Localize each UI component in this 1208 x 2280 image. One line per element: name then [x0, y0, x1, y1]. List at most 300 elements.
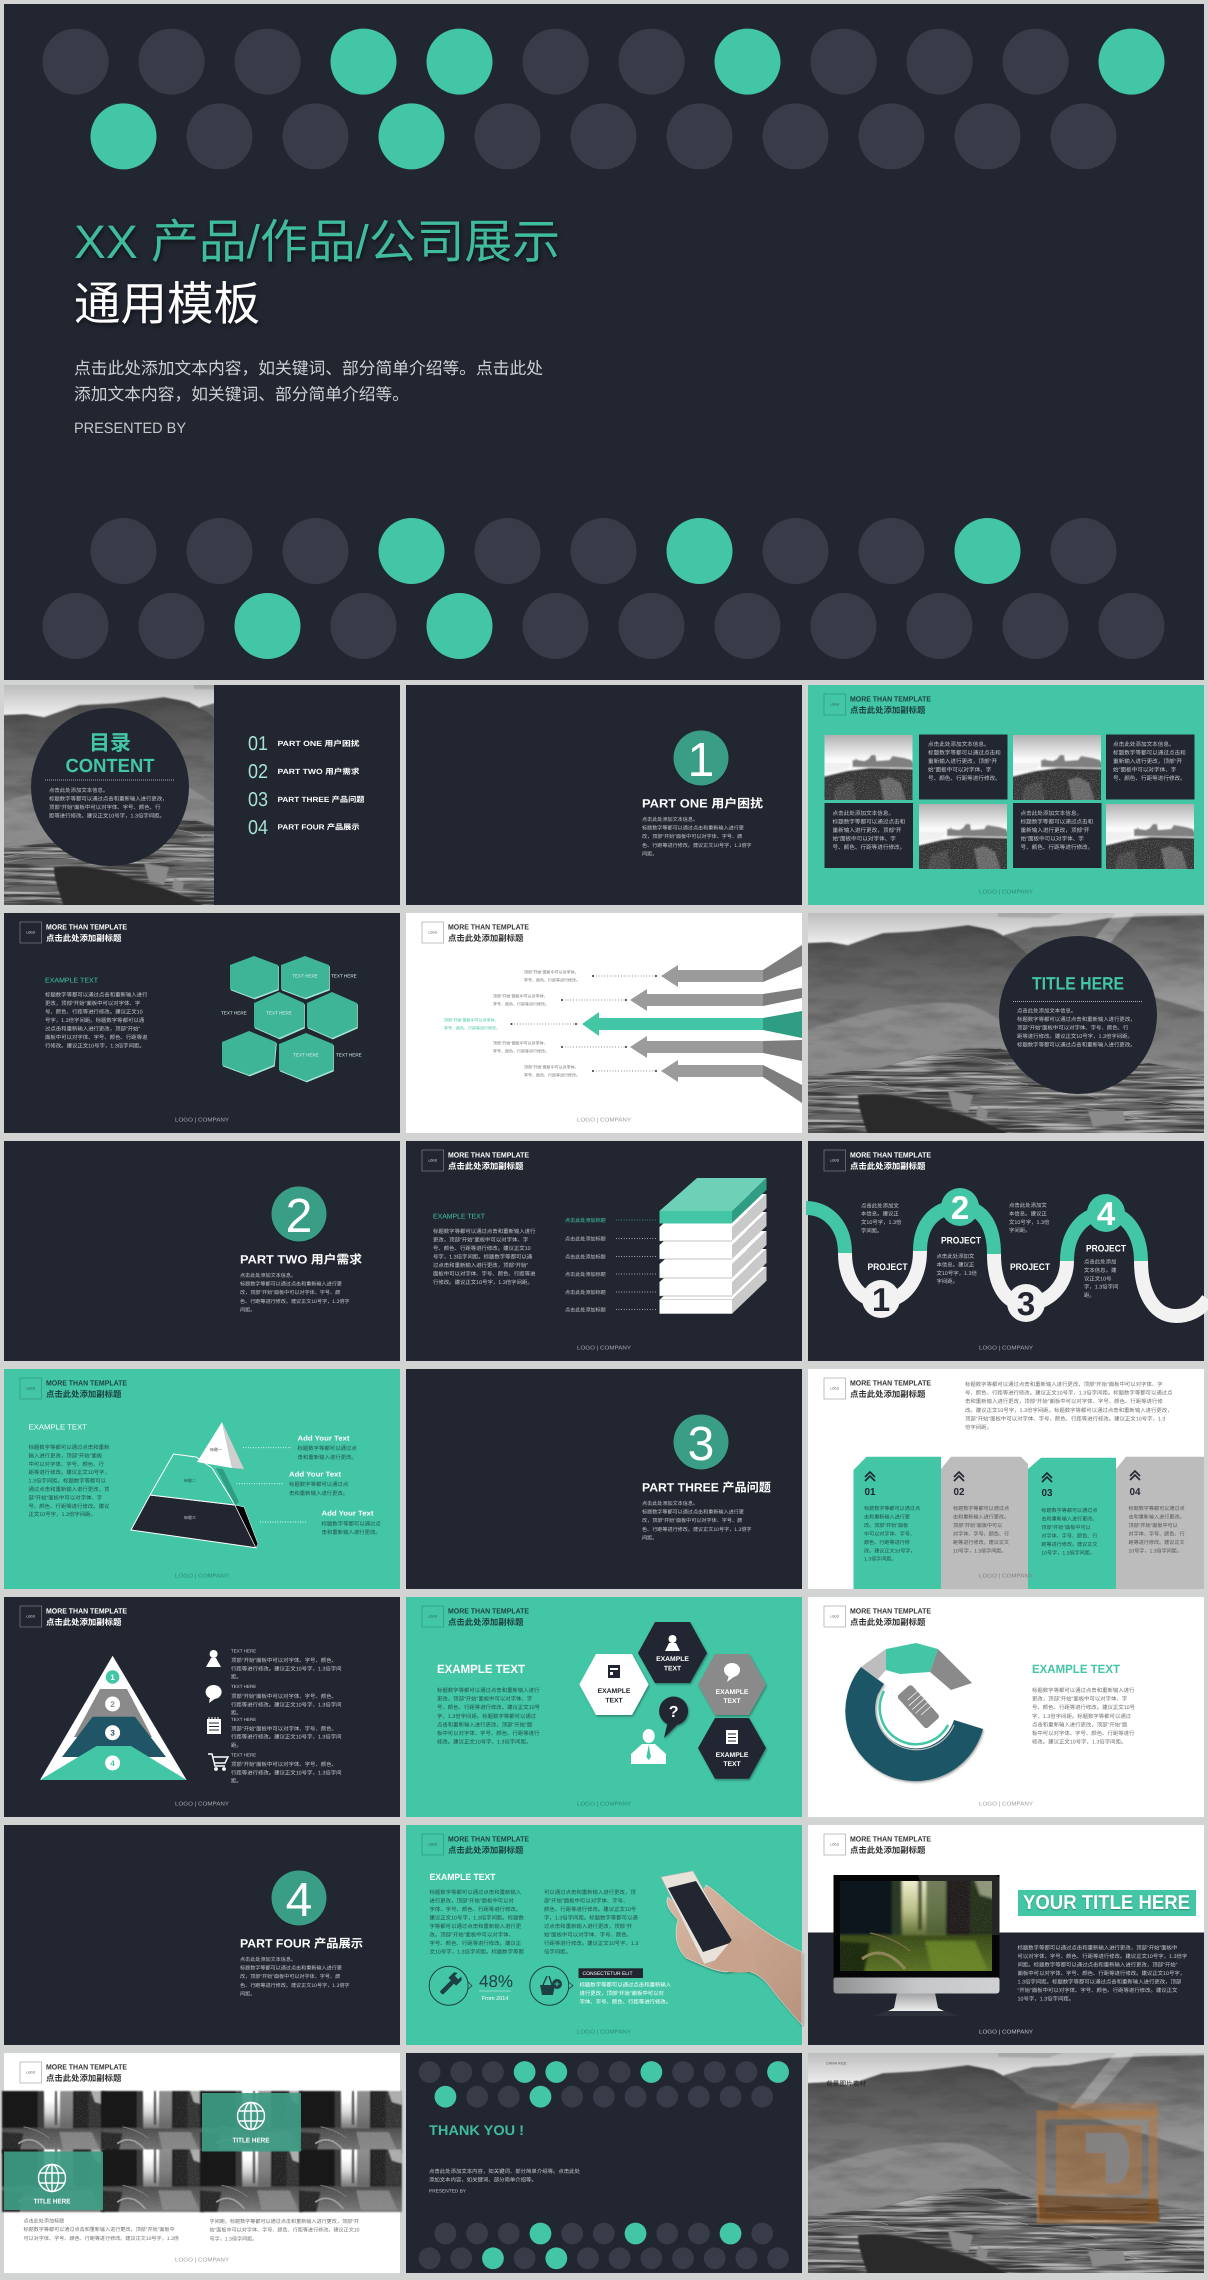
panel: hexagon slide: [4, 913, 400, 1133]
body column 1: 字号、颜色、行距等进行修改。建议正: [430, 1940, 522, 1947]
item 3: TEXT HERE: [231, 1717, 256, 1722]
header: [824, 1606, 931, 1627]
column 01: 颜色、行距等进行修: [864, 1539, 910, 1546]
header: 点击此处添加副标题: [448, 1161, 524, 1171]
contents list: 03: [248, 789, 268, 811]
header: [824, 1150, 931, 1171]
section title: PART THREE 产品问题: [642, 1480, 771, 1494]
text tile top 1: 始”面板中可以对字体、字: [928, 766, 992, 774]
example body: 点击和重新输入进行更改，顶部“开始”面: [1032, 1721, 1128, 1728]
text tile bottom 2: 标题数字等都可以通过点击和: [1020, 818, 1094, 826]
header: MORE THAN TEMPLATE: [448, 1834, 529, 1844]
example body: 行修改。建议正文10号字，1.3倍字间距。: [45, 1042, 145, 1050]
example body: 面板中可以对字体、字号、颜色、行距等进: [433, 1270, 536, 1278]
title circle: 顶部“开始”面板中可以对字体、字号、颜色、行: [1017, 1024, 1129, 1032]
step 3: 3: [1017, 1285, 1035, 1322]
example body: 号、颜色、行距等进行修改。建议正文10: [45, 1008, 143, 1016]
step text: 本信息。建议正: [861, 1211, 899, 1218]
photo wall: [2, 2091, 402, 2212]
footer: LOGO | COMPANY: [979, 888, 1033, 896]
arrow 2: 字号、颜色、行距等进行修改。: [493, 1002, 549, 1006]
section text: 色、行距等进行修改。建议正文10号字，1.3倍字: [642, 1526, 752, 1533]
example body: 更改，顶部“开始”面板中可以对字体、字: [1032, 1696, 1128, 1703]
section number badge: [272, 1186, 326, 1243]
title circle: TITLE HERE: [1032, 974, 1124, 994]
column 03: 对字体、字号、颜色、行: [1041, 1532, 1097, 1539]
contents list: [248, 733, 365, 839]
example body: 过点击和重新输入进行更改，顶部“开始”: [433, 1262, 528, 1269]
panel: contents slide: [1, 682, 403, 908]
header: 点击此处添加副标题: [850, 1389, 926, 1399]
example body: 行修改。建议正文10号字，1.3倍字间距。: [433, 1279, 533, 1286]
column 03: 标题数字等都可以通过点: [1041, 1507, 1097, 1514]
panel: section two: [4, 1141, 400, 1361]
item 1: 顶部“开始”面板中可以对字体、字号、颜色、: [231, 1657, 337, 1664]
section number badge: 1: [688, 734, 714, 787]
column 01: 改。建议正文10号字，: [864, 1547, 916, 1554]
donut chart: [845, 1643, 983, 1781]
stat: 48 percent: From 2014: [481, 1996, 509, 2002]
example body: 正文10号字，1.3倍字间距。: [28, 1511, 96, 1518]
intro text: 改。建议正文10号字，1.3倍字间距。标题数字等都可以通过点击和重新输入进行更改，: [965, 1407, 1173, 1414]
project labels: [868, 1236, 1126, 1273]
step text: 点击此处添加文: [861, 1202, 899, 1209]
body column 2: 始”面板中可以对字体、字号、颜色、: [544, 1932, 632, 1938]
example heading: EXAMPLE TEXT: [433, 1214, 486, 1220]
header: [20, 2062, 127, 2083]
panel: four columns slide: [808, 1369, 1204, 1589]
plate labels: 点击此处添加标题: [565, 1306, 606, 1314]
header: 点击此处添加副标题: [850, 1617, 926, 1627]
footer: LOGO | COMPANY: [979, 2028, 1033, 2036]
tile: globe top: TITLE HERE: [232, 2138, 270, 2144]
panel: forest photo wall slide: [2, 2053, 402, 2273]
step 2: 2: [951, 1189, 969, 1226]
header: MORE THAN TEMPLATE: [448, 1150, 529, 1160]
panel: stacked plates slide: [406, 1141, 802, 1361]
example body: 号、颜色、行距等进行修改。建议: [28, 1503, 110, 1510]
example body: 板中可以对字体、字号、颜色、行距等进行: [1032, 1730, 1135, 1737]
column 01: 中可以对字体、字号、: [864, 1530, 915, 1537]
text tile bottom 1: 标题数字等都可以通过点击和: [832, 818, 906, 826]
hexagon cluster: TEXT HERE: [292, 974, 318, 978]
dot pattern: [419, 2061, 789, 2269]
plate labels: 点击此处添加标题: [565, 1217, 606, 1224]
text tile top 2: 点击此处添加文本信息。: [1113, 741, 1175, 748]
header: [422, 922, 529, 943]
header: 点击此处添加副标题: [448, 1617, 524, 1627]
item 2: 距。: [231, 1710, 242, 1717]
section text: 间距。: [240, 1306, 255, 1313]
header: 点击此处添加副标题: [46, 1617, 122, 1627]
header: MORE THAN TEMPLATE: [46, 922, 127, 932]
thank you heading: THANK YOU !: [429, 2122, 524, 2138]
intro text: 号、颜色、行距等进行修改。建议正文10号字，1.3倍字间距。标题数字等都可以通过点: [965, 1390, 1173, 1397]
contents circle: 目录: [89, 732, 131, 755]
header: 点击此处添加副标题: [850, 705, 926, 715]
column 04: 对字体、字号、颜色、行: [1128, 1530, 1185, 1537]
header: MORE THAN TEMPLATE: [46, 1378, 127, 1388]
arrow 3 highlighted: 顶部“开始”面板中可以对字体、: [444, 1018, 499, 1022]
text tile bottom 1: 始”面板中可以对字体、字: [832, 836, 896, 842]
header: [422, 1150, 529, 1171]
body column 1: 进行更改，顶部“开始”面板中可以对: [430, 1898, 515, 1904]
column 02: 顶部“开始”面板中可以: [953, 1522, 1002, 1529]
title circle: 点击此处添加文本信息。: [1017, 1008, 1076, 1014]
presented by: PRESENTED BY: [74, 420, 186, 437]
section number badge: 3: [688, 1418, 714, 1471]
text tile bottom 2: 始”面板中可以对字体、字: [1020, 836, 1084, 842]
example body: 面板中可以对字体、字号、颜色、行距等进: [45, 1034, 148, 1041]
section text: 点击此处添加文本信息。: [642, 816, 698, 823]
hexagon: calendar: [579, 1654, 649, 1715]
example body: 修改。建议正文10号字，1.3倍字间距。: [437, 1739, 531, 1746]
arrow 4: [493, 1036, 802, 1061]
example body: 号字，1.3倍字间距。标题数字等都可以通: [433, 1254, 533, 1260]
hexagon cluster: TEXT HERE: [336, 1052, 362, 1058]
arrow 5: 顶部“开始”面板中可以对字体、: [524, 1064, 579, 1070]
intro text: 添加文本内容，如关键词、部分简单介绍等。: [74, 385, 409, 404]
arrow 4: 字号、颜色、行距等进行修改。: [493, 1048, 549, 1054]
header: LOGO: [26, 1386, 36, 1390]
contents list: 02: [248, 761, 268, 783]
body text: 10号字，1.3倍字间距。: [1018, 1996, 1074, 2002]
header: MORE THAN TEMPLATE: [850, 1150, 931, 1160]
header: LOGO: [830, 1614, 840, 1618]
text tile top 2: [1106, 734, 1194, 800]
presented by: PRESENTED BY: [429, 2189, 467, 2195]
step text: 距。: [1084, 1292, 1095, 1299]
photo note: 背景图片素材: [826, 2080, 866, 2088]
body column 2: 过点击和重新输入进行更改，顶部“开: [544, 1923, 633, 1930]
text tile bottom 1: 号、颜色、行距等进行修改。: [832, 844, 905, 851]
item 4: 距。: [231, 1778, 242, 1785]
footer: LOGO | COMPANY: [979, 1572, 1033, 1580]
project labels: PROJECT: [1010, 1262, 1050, 1273]
hexagon: chat: [698, 1654, 766, 1715]
step 4: [1087, 1194, 1125, 1232]
item 1: TEXT HERE: [231, 1648, 256, 1654]
header: MORE THAN TEMPLATE: [850, 1606, 931, 1616]
arrow 5: [524, 1060, 802, 1103]
step 1: [862, 1280, 900, 1318]
header: MORE THAN TEMPLATE: [448, 922, 529, 932]
column 01: 1.3倍字间距。: [864, 1556, 897, 1563]
section number badge: [674, 730, 728, 787]
body left: 可以对字体、字号、颜色、行距等进行修改。建议正文10号字，1.3倍: [24, 2235, 179, 2242]
header: LOGO: [830, 1158, 840, 1162]
title: product showcase: XX 产品/作品/公司展示: [74, 215, 560, 268]
header: LOGO: [428, 1158, 438, 1162]
column 03: 顶部“开始”面板中可以: [1041, 1524, 1091, 1531]
hexagon: chat: TEXT: [723, 1698, 742, 1705]
section text: 色、行距等进行修改。建议正文10号字，1.3倍字: [240, 1982, 350, 1989]
contents list: PART FOUR 产品展示: [278, 822, 360, 832]
footer: LOGO | COMPANY: [175, 1572, 229, 1580]
body right: 字间距。标题数字等都可以通过点击和重新输入进行更改，顶部“开: [210, 2218, 359, 2225]
section number badge: [272, 1870, 326, 1927]
text tile top 2: 号、颜色、行距等进行修改。: [1113, 775, 1186, 782]
header: [824, 1834, 931, 1855]
project labels: PROJECT: [868, 1262, 908, 1273]
project labels: PROJECT: [941, 1236, 981, 1246]
footer: LOGO | COMPANY: [577, 1800, 631, 1808]
icon: person: [206, 1650, 221, 1667]
step text: 文10号字，1.3倍: [1009, 1219, 1050, 1226]
label 2: [237, 1470, 349, 1497]
example body: 标题数字等都可以通过点击和重新输入进行: [437, 1687, 540, 1694]
body column 1: 文10号字，1.3倍字间距。标题数字等都: [430, 1948, 524, 1956]
example body: 中可以对字体、字号、颜色、行: [28, 1461, 105, 1468]
body column 2: 行距等进行修改。建议正文10号字，1.3: [544, 1940, 638, 1947]
header: LOGO: [830, 702, 840, 706]
panel: thank you slide: [406, 2053, 802, 2273]
project labels: PROJECT: [1086, 1244, 1126, 1254]
body column 2: 颜色、行距等进行修改。建议正文10号: [544, 1906, 637, 1913]
intro text: 击和重新输入进行更改，顶部“开始”面板中可以对字体、字号、颜色、行距等进行修: [965, 1398, 1163, 1405]
header: LOGO: [26, 930, 36, 934]
example body: 板中可以对字体、字号、颜色、行距等进行: [437, 1730, 540, 1737]
stat: 48 percent: 48%: [479, 1972, 513, 1991]
text tile bottom 2: 点击此处添加文本信息。: [1020, 810, 1082, 817]
section text: 标题数字等都可以通过点击和重新输入进行更: [240, 1281, 342, 1288]
section text: 标题数字等都可以通过点击和重新输入进行更: [642, 1509, 744, 1516]
hexagon: chat: EXAMPLE: [716, 1689, 749, 1696]
label text: 标题数字等都可以通过点击和重新输入: [580, 1982, 672, 1988]
header: [20, 1378, 127, 1399]
step 2: [941, 1188, 979, 1226]
text tile bottom 1: 点击此处添加文本信息。: [832, 810, 894, 817]
header: LOGO: [830, 1842, 840, 1846]
tile: globe bottom: TITLE HERE: [34, 2198, 71, 2206]
item 2: 顶部“开始”面板中可以对字体、字号、颜色、: [231, 1693, 337, 1700]
panel: section one: [406, 685, 802, 905]
item 2: 行距等进行修改。建议正文10号字，1.3倍字间: [231, 1701, 342, 1708]
title circle: 标题数字等都可以通过点击和重新输入进行更改。: [1017, 1042, 1136, 1048]
body column 1: 字等都可以通过点击和重新输入进行更: [430, 1923, 522, 1930]
footer: LOGO | COMPANY: [577, 1344, 631, 1352]
question bubble: ?: [669, 1704, 678, 1721]
title circle: [999, 936, 1157, 1094]
header: [422, 1834, 529, 1855]
icon: wrench badge: [429, 1966, 472, 2005]
label 3: 击和重新输入进行更改。: [322, 1529, 381, 1536]
body column 2: 字，1.3倍字间距。标题数字等都可以通: [544, 1914, 638, 1922]
example body: 标题数字等都可以通过点击和重新输入进行: [45, 992, 148, 998]
arrow 2: [493, 988, 802, 1011]
header: LOGO: [830, 1386, 840, 1390]
item 1: 距。: [231, 1674, 242, 1681]
section text: 色、行距等进行修改。建议正文10号字，1.3倍字: [642, 842, 752, 849]
step text: 本信息。建议正: [1009, 1210, 1047, 1217]
header: MORE THAN TEMPLATE: [850, 1834, 931, 1844]
header: LOGO: [428, 1842, 438, 1846]
contents list: 04: [248, 817, 268, 839]
body text: 可以对字体、字号、颜色、行距等进行修改。建议正文10号字，1.3倍字: [1018, 1953, 1188, 1960]
plate labels: 点击此处添加标题: [565, 1236, 606, 1242]
step 1: 1: [872, 1281, 890, 1318]
plate labels: 点击此处添加标题: [565, 1289, 606, 1296]
column 03: 距等进行修改。建议正文: [1041, 1541, 1097, 1548]
section text: 点击此处添加文本信息。: [240, 1956, 296, 1963]
header: 点击此处添加副标题: [46, 933, 122, 943]
text tile top 2: 标题数字等都可以通过点击和: [1113, 750, 1186, 756]
footer: LOGO | COMPANY: [979, 1800, 1033, 1808]
column 03: 10号字，1.3倍字间距。: [1041, 1549, 1095, 1556]
contents circle: [31, 708, 189, 866]
column 04: 顶部“开始”面板中可以: [1128, 1522, 1178, 1529]
column 02: 10号字，1.3倍字间距。: [953, 1547, 1006, 1554]
header: MORE THAN TEMPLATE: [448, 1606, 529, 1616]
title banner: YOUR TITLE HERE: [1023, 1892, 1190, 1914]
step text: 字间距。: [936, 1278, 958, 1285]
label text: 进行更改，顶部“开始”面板中可以对: [580, 1990, 665, 1997]
question bubble: [659, 1696, 688, 1738]
example body: 点击和重新输入进行更改，顶部“开始”面: [437, 1721, 533, 1728]
pyramid graphic: 标题二: [184, 1478, 196, 1483]
body left: 点击此处添加标题: [24, 2218, 64, 2224]
pyramid: 1: [110, 1673, 115, 1682]
title circle: 标题数字等都可以通过点击和重新输入进行更改，: [1017, 1016, 1136, 1023]
panel: section four: [4, 1825, 400, 2045]
step text: 字，1.3倍字间: [1084, 1284, 1118, 1291]
column 04: 04: [1130, 1487, 1141, 1498]
panel: section three: [406, 1369, 802, 1589]
user icon: [631, 1729, 666, 1764]
item 1: 行距等进行修改。建议正文10号字，1.3倍字间: [231, 1665, 342, 1672]
arrow 3 highlighted: 字号、颜色、行距等进行修改。: [444, 1026, 500, 1030]
step 4: 4: [1097, 1195, 1116, 1232]
column 02: 击和重新输入进行更改。: [953, 1513, 1009, 1520]
text tile top 1: [919, 734, 1008, 800]
item 3: 距。: [231, 1742, 242, 1749]
hexagon: person: [638, 1622, 707, 1683]
column 01: 击和重新输入进行更: [864, 1513, 910, 1520]
phone in hand: [661, 1871, 802, 2025]
footer: LOGO | COMPANY: [175, 1116, 229, 1124]
panel: arrows slide: [406, 913, 802, 1133]
example body: 更改，顶部“开始”面板中可以对字体、字: [45, 1000, 141, 1007]
body text: 标题数字等都可以通过点击和重新输入进行更改，顶部“开始”面板中: [1018, 1944, 1177, 1952]
example heading: EXAMPLE TEXT: [437, 1662, 526, 1676]
closing text: 点击此处添加文本内容，如关键词、部分简单介绍等。点击此处: [429, 2168, 581, 2175]
text tile top 1: 号、颜色、行距等进行修改。: [928, 775, 1001, 782]
example body: 字，1.3倍字间距。标题数字等都可以通过: [437, 1713, 537, 1720]
column 04: 标题数字等都可以通过点: [1128, 1505, 1185, 1512]
contents circle: CONTENT: [66, 756, 155, 777]
column 02: [941, 1457, 1028, 1589]
body column 1: 标题数字等都可以通过点击和重新输入: [430, 1889, 522, 1896]
example heading: EXAMPLE TEXT: [45, 978, 99, 984]
text tile bottom 2: [1013, 803, 1102, 868]
subtitle: 通用模板: [74, 278, 260, 330]
contents list: PART TWO 用户需求: [278, 767, 360, 776]
watermark: [1038, 2103, 1160, 2221]
example body: 更改，顶部“开始”面板中可以对字体、字: [437, 1696, 533, 1703]
footer: LOGO | COMPANY: [175, 2256, 229, 2264]
pyramid graphic: 标题一: [210, 1447, 222, 1452]
step text: 文10号字，1.3倍: [861, 1219, 902, 1226]
pyramid graphic: [131, 1422, 258, 1548]
hexagon: clipboard: TEXT: [723, 1761, 742, 1768]
hexagon: person: EXAMPLE: [656, 1656, 689, 1663]
header: [20, 1606, 127, 1627]
panel: layered pyramid slide: [4, 1597, 400, 1817]
item 4: 行距等进行修改。建议正文10号字，1.3倍字间: [231, 1769, 342, 1776]
header: [20, 922, 127, 943]
column 04: 距等进行修改。建议正文: [1128, 1539, 1185, 1546]
body text: “开始”面板中可以对字体、字号、颜色、行距等进行修改。建议正文: [1018, 1987, 1178, 1994]
body text: 间距。标题数字等都可以通过点击和重新输入进行更改，顶部“开始”: [1018, 1962, 1178, 1968]
section text: 标题数字等都可以通过点击和重新输入进行更: [240, 1965, 342, 1972]
body column 1: 建议正文10号字，1.3倍字间距。标题数: [430, 1914, 524, 1922]
header: [422, 1606, 529, 1627]
section title: PART TWO 用户需求: [240, 1252, 362, 1266]
arrow 4: 顶部“开始”面板中可以对字体、: [493, 1040, 548, 1046]
body right: 始”面板中可以对字体、字号、颜色、行距等进行修改。建议正文10: [210, 2227, 360, 2234]
header: 点击此处添加副标题: [850, 1161, 926, 1171]
section text: 间距。: [642, 1534, 657, 1541]
column 03: 03: [1042, 1488, 1053, 1499]
header: LOGO: [428, 930, 438, 934]
header: 点击此处添加副标题: [448, 933, 524, 943]
section text: 点击此处添加文本信息。: [642, 1500, 698, 1507]
example body: 1.3倍字间距。标题数字等都可以: [28, 1478, 107, 1485]
step 3: [1007, 1284, 1045, 1322]
example body: 号、颜色、行距等进行修改。建议正文10号: [1032, 1704, 1136, 1711]
panel: icon hexagons slide: [406, 1597, 802, 1817]
text tile top 2: 始”面板中可以对字体、字: [1113, 766, 1177, 774]
intro text: 顶部“开始”面板中可以对字体、字号、颜色、行距等进行修改。建议正文10号字，1.3: [965, 1415, 1165, 1422]
pyramid: 3: [110, 1729, 115, 1738]
step text: 点击此处添加文: [936, 1253, 975, 1260]
step text: 字间距。: [861, 1228, 883, 1234]
section text: 改，顶部“开始”面板中可以对字体、字号、颜: [240, 1289, 340, 1296]
tile: globe top: [202, 2093, 301, 2152]
body text: 1.3倍字间距。标题数字等都可以通过点击和重新输入进行更改，顶部: [1018, 1978, 1182, 1986]
section text: 间距。: [240, 1990, 255, 1997]
section number badge: [674, 1414, 728, 1471]
plate labels: 点击此处添加标题: [565, 1254, 606, 1260]
contents circle: 标题数字等都可以通过点击和重新输入进行更改，: [49, 796, 168, 802]
closing text: 添加文本内容，如关键词、部分简单介绍等。: [429, 2177, 537, 2184]
label text: 字体、字号、颜色、行距等进行修改。: [580, 1998, 671, 2006]
footer: LOGO | COMPANY: [979, 1344, 1033, 1352]
contents list: PART ONE 用户困扰: [278, 739, 360, 748]
dark band: [808, 1932, 1204, 2045]
footer: LOGO | COMPANY: [577, 2028, 631, 2036]
arrow 1: 字号、颜色、行距等进行修改。: [524, 978, 580, 982]
section text: 点击此处添加文本信息。: [240, 1272, 296, 1279]
header: 点击此处添加副标题: [46, 2073, 122, 2083]
item 2: TEXT HERE: [231, 1684, 256, 1689]
pyramid graphic: 标题三: [184, 1515, 196, 1520]
hexagon cluster: TEXT HERE: [221, 1010, 247, 1016]
panel: cover slide: [4, 4, 1204, 680]
column 01: 标题数字等都可以通过点: [864, 1505, 920, 1512]
step text: 本信息。建议正: [936, 1261, 975, 1268]
text tile bottom 2: 重新输入进行更改，顶部“开: [1020, 827, 1090, 834]
hexagon: clipboard: EXAMPLE: [716, 1752, 749, 1759]
text tile bottom 1: 重新输入进行更改，顶部“开: [832, 827, 902, 834]
column 01: 改。顶部“开始”面板: [864, 1522, 908, 1529]
header: 点击此处添加副标题: [448, 1845, 524, 1855]
step text: 文本信息。建: [1084, 1267, 1117, 1274]
column 04: [1116, 1457, 1204, 1589]
body right: 号字，1.3倍字间距。: [210, 2235, 257, 2242]
header: MORE THAN TEMPLATE: [46, 1606, 127, 1616]
photo tiles: [822, 732, 1197, 872]
